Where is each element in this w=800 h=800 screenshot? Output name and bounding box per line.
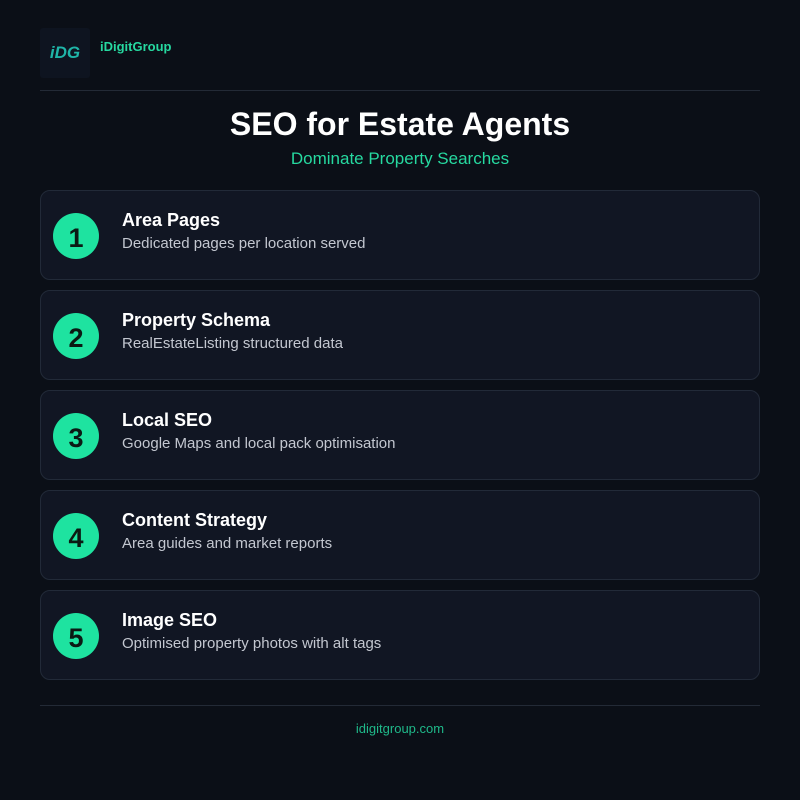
card 3: Local SEO xyxy=(122,410,212,430)
card 2: RealEstateListing structured data xyxy=(122,335,343,352)
card 5 xyxy=(40,590,760,680)
card 2: Property Schema xyxy=(122,310,270,330)
card 2: 2 xyxy=(68,323,84,353)
footer: idigitgroup.com xyxy=(356,721,444,736)
brand name: iDigitGroup xyxy=(100,39,172,54)
card 4: Area guides and market reports xyxy=(122,535,332,552)
card 3 xyxy=(40,390,760,480)
logo icon: iDG xyxy=(50,43,80,62)
card 1: Dedicated pages per location served xyxy=(122,235,366,252)
card 2 xyxy=(40,290,760,380)
card 5: 5 xyxy=(68,623,84,653)
card 1: Area Pages xyxy=(122,210,220,230)
logo icon xyxy=(40,28,90,78)
card 5: Optimised property photos with alt tags xyxy=(122,635,381,652)
card 4: Content Strategy xyxy=(122,510,267,530)
subtitle: Dominate Property Searches xyxy=(291,149,509,168)
card 1 xyxy=(40,190,760,280)
card 1: 1 xyxy=(68,223,84,253)
card 4 xyxy=(40,490,760,580)
title: SEO for Estate Agents xyxy=(230,106,570,142)
card 4: 4 xyxy=(68,523,84,553)
card 3: 3 xyxy=(68,423,84,453)
card 5: Image SEO xyxy=(122,610,217,630)
card 3: Google Maps and local pack optimisation xyxy=(122,435,396,452)
